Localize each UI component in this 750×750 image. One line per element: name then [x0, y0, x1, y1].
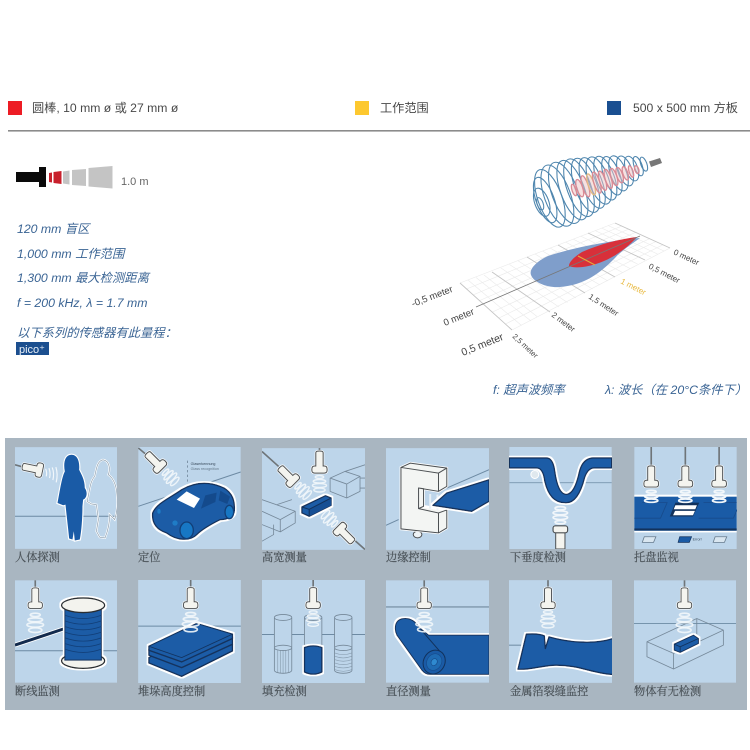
chart: beam plot on floor grid: 1,5 meter — [587, 292, 620, 318]
tile: tray monitoring: Error! — [693, 537, 702, 541]
text block: specifications: 120 mm 盲区 — [17, 222, 91, 236]
caption: 物体有无检测 — [634, 684, 701, 698]
caption: 高宽测量 — [262, 550, 307, 564]
caption: 直径测量 — [386, 684, 431, 698]
chart: beam plot on floor grid: 2 meter — [550, 310, 577, 334]
caption: 边缘控制 — [386, 550, 431, 564]
text block: specifications: 1,300 mm 最大检测距离 — [17, 271, 151, 285]
beam lobe: rod — [569, 237, 637, 267]
tile: positioning: Glaserkennung — [191, 462, 215, 466]
tile: stack height control — [138, 580, 241, 698]
caption: 断线监测 — [15, 684, 60, 698]
legend: working range: 工作范围 — [380, 101, 429, 115]
tile: diameter measurement — [386, 580, 489, 698]
caption: 托盘监视 — [634, 550, 679, 564]
tile: metal foil crack monitoring — [509, 580, 613, 698]
icon: helical ultrasonic beam — [524, 133, 662, 234]
text block: specifications: 1,000 mm 工作范围 — [17, 247, 126, 261]
caption: 填充检测 — [262, 684, 307, 698]
chart: beam plot on floor grid: 2,5 meter — [511, 332, 540, 360]
chart: beam plot on floor grid: -0,5 meter — [410, 284, 454, 310]
legend: round rod target: 圆棒, 10 mm ø 或 27 mm ø — [32, 101, 179, 115]
caption: 金属箔裂缝监控 — [510, 684, 588, 698]
beam lobe: plate — [531, 238, 640, 287]
tile: wire break monitoring — [15, 580, 117, 698]
chart: beam plot on floor grid: 1 meter — [619, 277, 648, 297]
text block: specifications — [17, 222, 177, 340]
chart: beam plot on floor grid — [410, 223, 701, 360]
legend: plate target: 500 x 500 mm 方板 — [633, 100, 738, 115]
text block: specifications: 以下系列的传感器有此量程： — [17, 326, 177, 340]
tile: fill level detection — [262, 580, 365, 698]
tile: sag detection — [509, 447, 612, 564]
chart: beam plot on floor grid: 0 meter — [672, 248, 701, 267]
tile: object presence detection — [634, 580, 736, 698]
tile: positioning — [138, 447, 241, 564]
tile: positioning: Glass recognition — [191, 467, 219, 471]
footnote: frequency: f: 超声波频率 — [493, 383, 566, 397]
chart: beam plot on floor grid: 0,5 meter — [460, 331, 506, 359]
tile: person detection — [15, 447, 117, 564]
chart: beam plot on floor grid: 0,5 meter — [647, 262, 682, 285]
badge: pico+ — [16, 342, 49, 356]
icon: sensor range bar — [16, 166, 149, 188]
caption: 堆垛高度控制 — [138, 684, 205, 698]
caption: 下垂度检测 — [510, 550, 566, 564]
badge: pico+: pico⁺ — [19, 344, 45, 356]
text block: specifications: f = 200 kHz, λ = 1.7 mm — [17, 296, 147, 310]
caption: 定位 — [138, 551, 160, 564]
icon: sensor range bar: 1.0 m — [121, 176, 149, 188]
caption: 人体探测 — [15, 550, 60, 564]
legend: working range — [355, 101, 429, 115]
chart: beam plot on floor grid: 0 meter — [442, 307, 476, 329]
tile: height and width measurement — [262, 448, 365, 564]
footnote: wavelength: λ: 波长（在 20°C条件下） — [604, 383, 747, 397]
tile: tray monitoring — [634, 447, 737, 564]
panel: applications — [5, 438, 747, 710]
tile: edge control — [386, 448, 489, 564]
